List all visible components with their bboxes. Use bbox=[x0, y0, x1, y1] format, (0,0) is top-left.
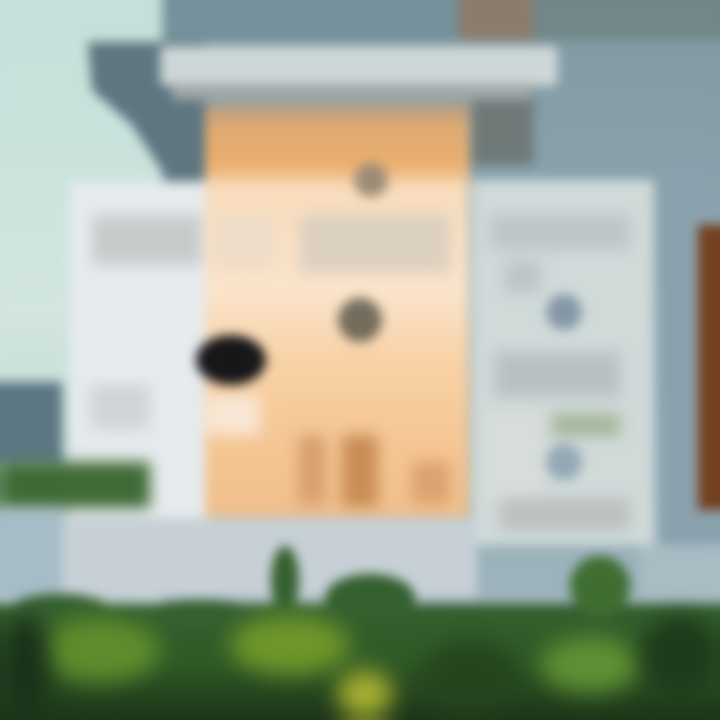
text block: right panel top bbox=[490, 215, 630, 250]
text block: left panel top bbox=[92, 215, 202, 265]
panel: right bbox=[472, 180, 654, 545]
text block: right panel small bbox=[505, 262, 540, 292]
icon: right blue circle bbox=[546, 294, 582, 330]
icon: top circle bbox=[354, 163, 388, 197]
title band bbox=[160, 46, 558, 100]
brown panel at right edge bbox=[698, 225, 720, 510]
foliage at bottom bbox=[0, 546, 720, 720]
bar chart bbox=[298, 435, 450, 507]
panel: left bbox=[70, 182, 210, 520]
building roof shadow: right bbox=[472, 90, 534, 165]
dark block at left edge bbox=[0, 382, 62, 462]
text block: right panel bottom bbox=[500, 498, 630, 530]
icon: middle circle bbox=[338, 298, 382, 342]
icon: right lower circle bbox=[546, 444, 582, 480]
light strip: left of centre bbox=[205, 395, 260, 435]
panel: centre orange bbox=[205, 105, 469, 517]
building roof shadow: left bbox=[88, 42, 205, 180]
icon: black oval bbox=[196, 335, 266, 385]
text block: centre upper left bbox=[215, 215, 275, 270]
text block: centre upper right bbox=[300, 215, 450, 273]
green label bbox=[552, 414, 620, 436]
light block: right panel lower left bbox=[485, 410, 543, 505]
green strip at left bbox=[0, 462, 150, 508]
text block: left panel lower bbox=[90, 385, 150, 430]
lower pale band bbox=[0, 508, 720, 600]
text block: right panel middle bbox=[495, 352, 620, 397]
